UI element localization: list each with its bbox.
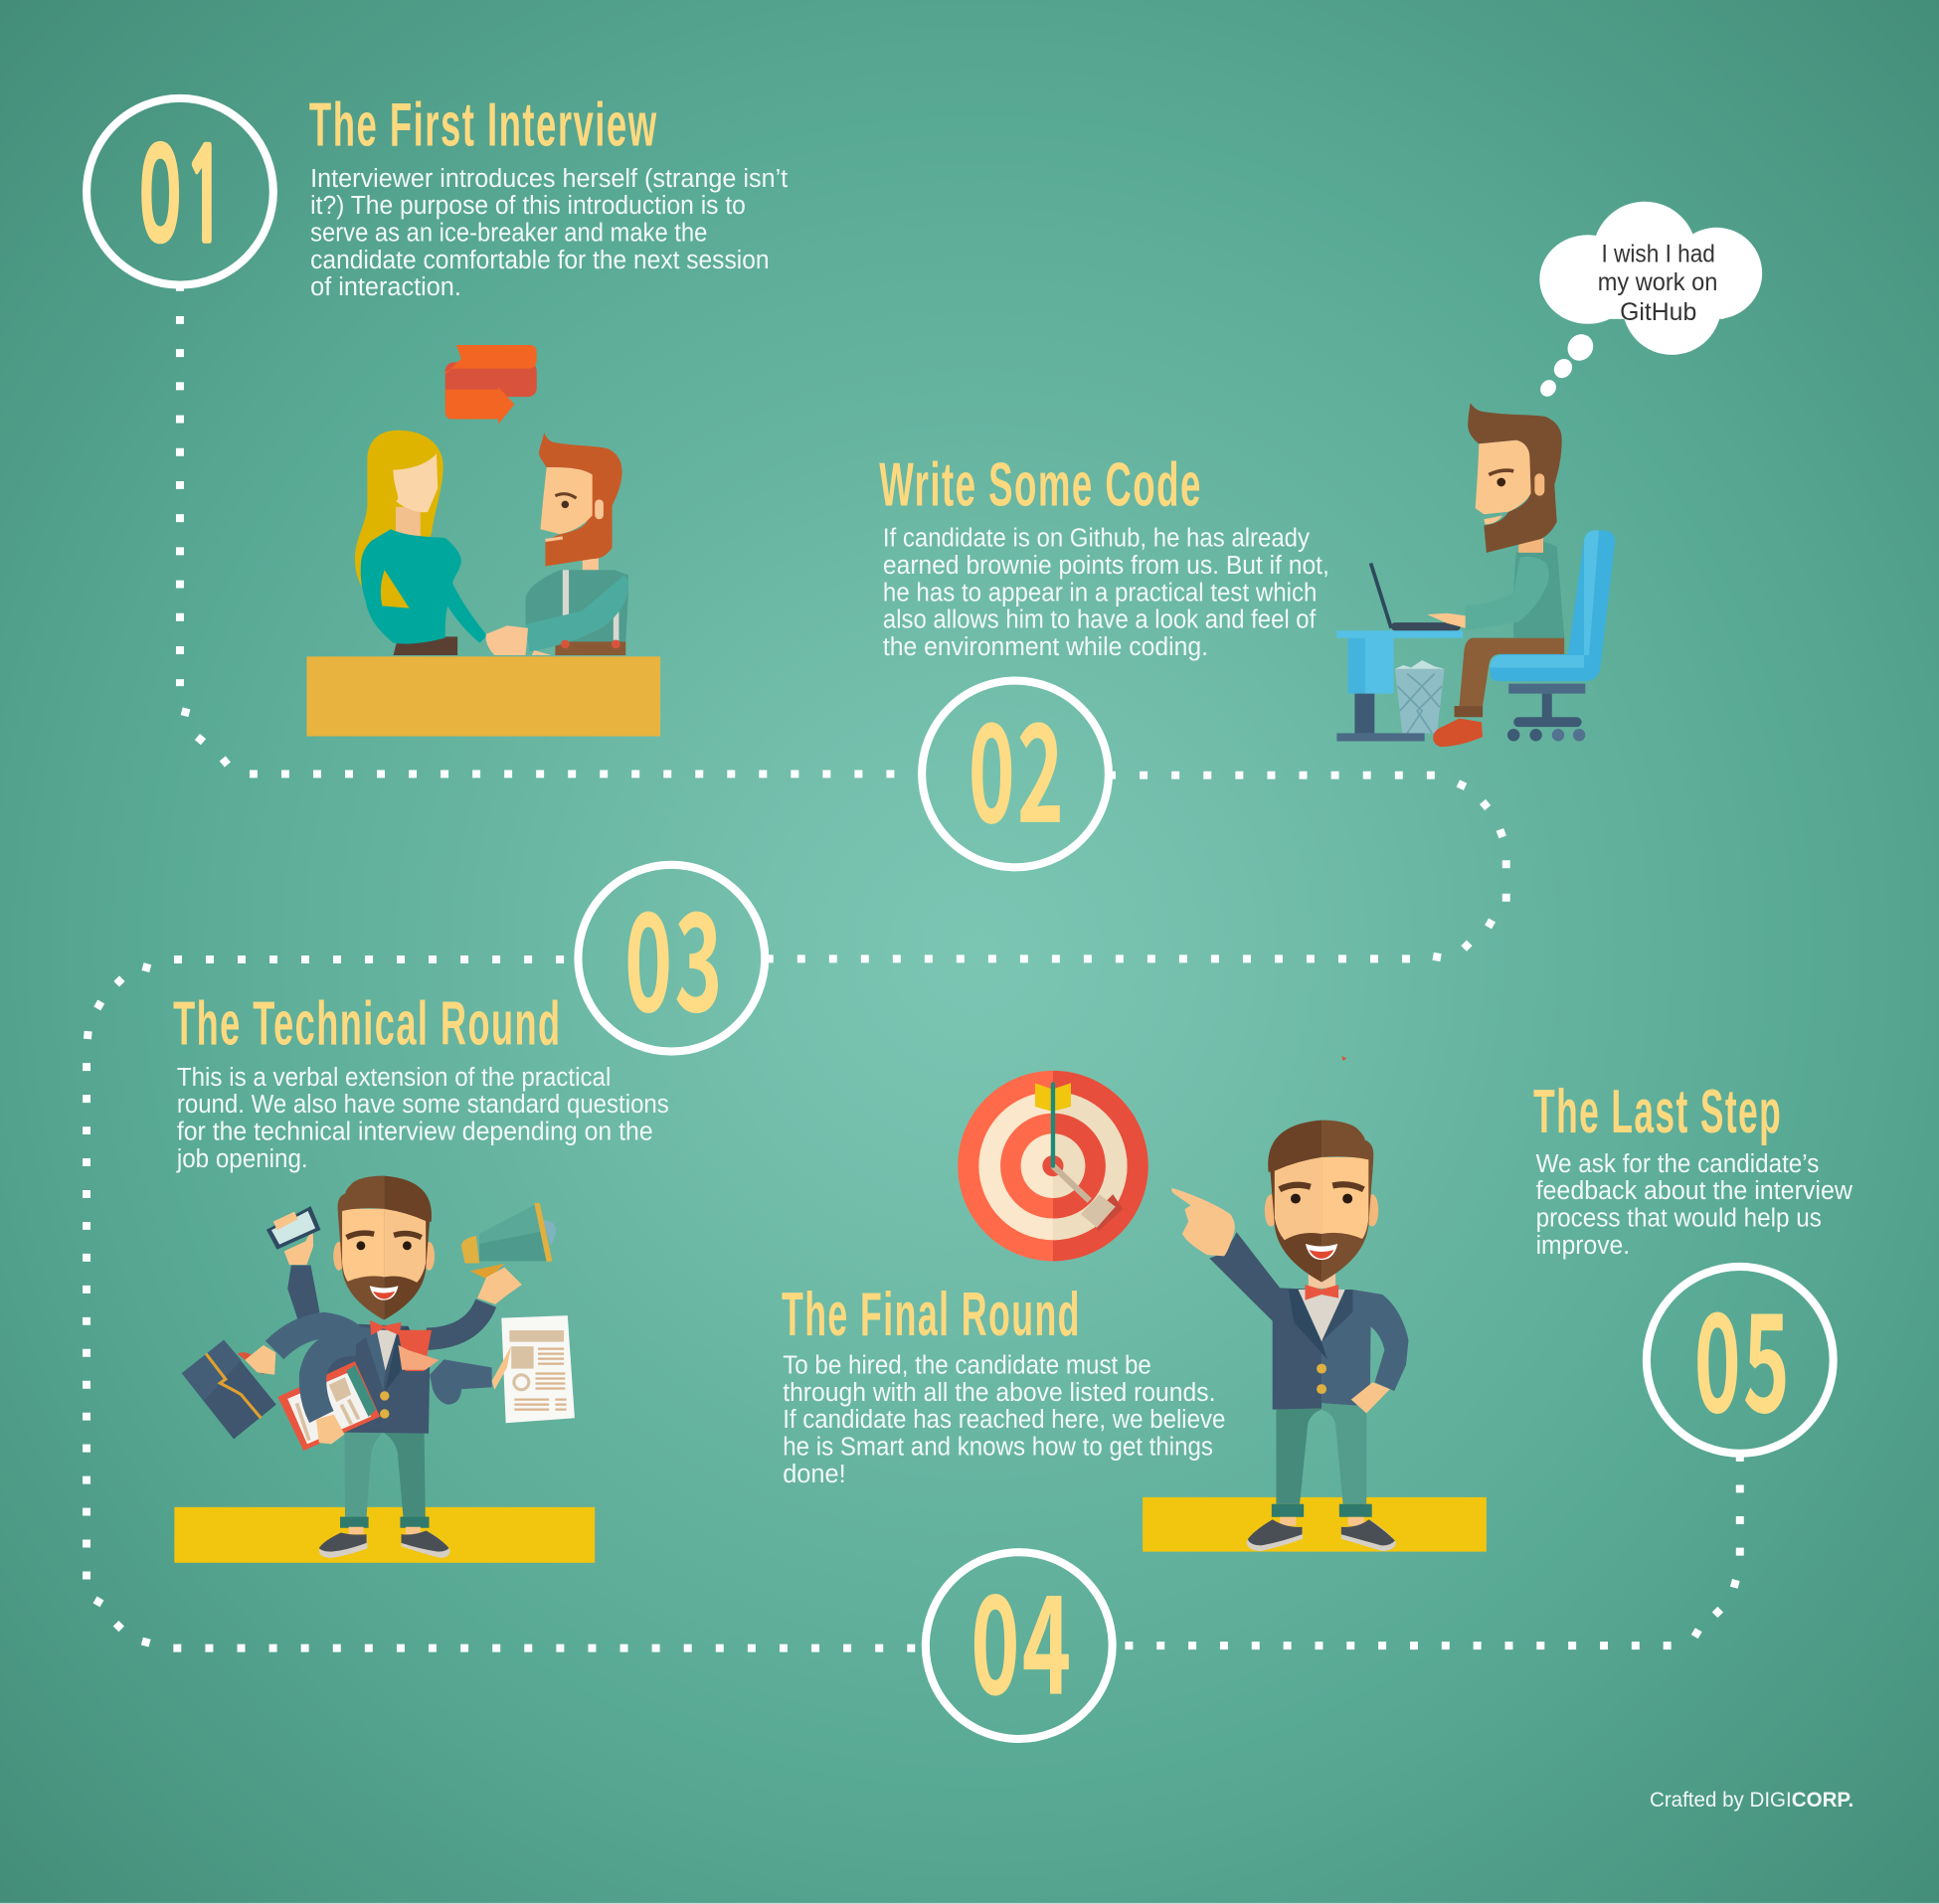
text: step 5 description: feedback about the interview (1536, 1177, 1853, 1205)
number badge 01 (87, 98, 273, 285)
text: step 2 description: he has to appear in a practical test which (883, 579, 1317, 606)
step 1 block (87, 91, 788, 737)
text: step 5 description: improve. (1536, 1232, 1630, 1260)
text: step 3 description: job opening. (176, 1145, 308, 1173)
desk with laptop (1336, 563, 1463, 741)
text: step 4 description: To be hired, the candidate must be (783, 1352, 1151, 1380)
wastebasket (1395, 660, 1445, 733)
icon: speech arrows (445, 345, 537, 425)
jacket torso (309, 1320, 430, 1434)
text: step 2 description: earned brownie points from us. But if not, (883, 552, 1329, 580)
text: step 1 description: of interaction. (310, 273, 461, 301)
text: step 4 description: through with all the above listed rounds. (783, 1379, 1215, 1407)
number badge 04: 04 (970, 1537, 1073, 1734)
heading: The Technical Round: The Technical Round (173, 990, 562, 1059)
head (1265, 1121, 1378, 1283)
thought cloud: GitHub (1620, 298, 1696, 326)
text: step 4 description: done! (783, 1461, 846, 1488)
trousers (1276, 1403, 1322, 1504)
bearded man (526, 433, 628, 655)
briefcase (182, 1340, 276, 1439)
number badge 03: 03 (624, 854, 725, 1051)
number badge 02: 02 (969, 665, 1066, 862)
number badge 01: 01 (138, 133, 229, 260)
text: step 1 description: serve as an ice-breaker and make the (310, 219, 707, 247)
arm reaching to briefcase (274, 1325, 359, 1350)
dotted path: step 1 to step 2 (180, 283, 903, 774)
text: step 1 description (310, 165, 788, 301)
step 4 block (782, 1056, 1487, 1739)
woman (355, 431, 487, 655)
heading: The First Interview: The First Interview (309, 91, 658, 160)
hand with red cup (398, 1330, 439, 1371)
text: step 5 description: We ask for the candidate’s (1536, 1150, 1819, 1178)
arm with phone (266, 1206, 320, 1320)
arm holding clipboard (312, 1342, 356, 1444)
text: step 1 description: Interviewer introduces herself (strange isn’t (310, 165, 788, 193)
text: step 3 description (176, 1064, 669, 1173)
number badge 02 (922, 665, 1109, 867)
number badge 04 (926, 1537, 1113, 1739)
yellow platform (1143, 1497, 1487, 1552)
text: step 2 description (883, 525, 1329, 661)
number badge 05 (1647, 1255, 1834, 1454)
clasped hands (486, 625, 552, 655)
illustration: handshake at desk (306, 345, 660, 737)
thought cloud: I wish I had (1601, 241, 1715, 268)
illustration: man coding at desk (1336, 403, 1615, 747)
illustration: man pointing at target (1143, 1121, 1487, 1552)
text: step 4 description: he is Smart and knows how to get things (783, 1434, 1213, 1462)
arm with newspaper (430, 1315, 575, 1423)
credit line: Crafted by DIGICORP. (1650, 1789, 1853, 1812)
heading: The Final Round: The Final Round (782, 1281, 1081, 1349)
clipboard (277, 1361, 380, 1451)
text: step 5 description: process that would help us (1536, 1205, 1822, 1233)
text: step 5 description (1536, 1150, 1853, 1260)
text: step 2 description: the environment while coding. (883, 633, 1208, 661)
step 3 block (173, 854, 765, 1563)
cuffs and shoes (1247, 1504, 1396, 1551)
text: step 3 description: for the technical interview depending on the (177, 1119, 653, 1146)
thought cloud: my work on (1598, 268, 1717, 296)
number badge 05: 05 (1694, 1255, 1792, 1452)
text: step 1 description: candidate comfortable for the next session (310, 247, 770, 274)
head (333, 1176, 435, 1320)
icon: target with arrow (958, 1071, 1148, 1261)
dotted path: step 2 to step 3 (767, 776, 1510, 961)
step 5 block (1533, 1078, 1853, 1454)
text: step 3 description: round. We also have some standard questions (177, 1091, 669, 1119)
neck and bow tie (1306, 1274, 1338, 1300)
office chair (1491, 530, 1615, 741)
seated man (1427, 403, 1564, 747)
text: step 4 description: If candidate has reached here, we believe (783, 1406, 1225, 1434)
red speck (1341, 1056, 1346, 1061)
trousers and shoes (319, 1433, 450, 1558)
number badge 03 (578, 854, 765, 1052)
thought cloud (1537, 202, 1762, 400)
text: step 3 description: This is a verbal extension of the practical (177, 1064, 611, 1092)
text: step 1 description: it?) The purpose of this introduction is to (310, 192, 746, 220)
hand on hip (1351, 1382, 1390, 1413)
text: step 2 description: If candidate is on Github, he has already (883, 525, 1310, 553)
text: step 4 description (783, 1352, 1225, 1488)
blue jacket (1209, 1232, 1408, 1410)
pointing hand (1171, 1188, 1235, 1256)
text: step 2 description: also allows him to have a look and feel of (883, 606, 1317, 634)
arm with megaphone (427, 1203, 556, 1339)
illustration: multitasking man (174, 1176, 595, 1563)
dotted path: step 3 to step 4 (84, 959, 921, 1648)
heading: Write Some Code: Write Some Code (879, 451, 1202, 520)
step 2 block (879, 202, 1762, 867)
yellow platform (174, 1507, 595, 1563)
dotted path: step 4 to step 5 (1125, 1454, 1740, 1645)
desk (306, 656, 660, 737)
